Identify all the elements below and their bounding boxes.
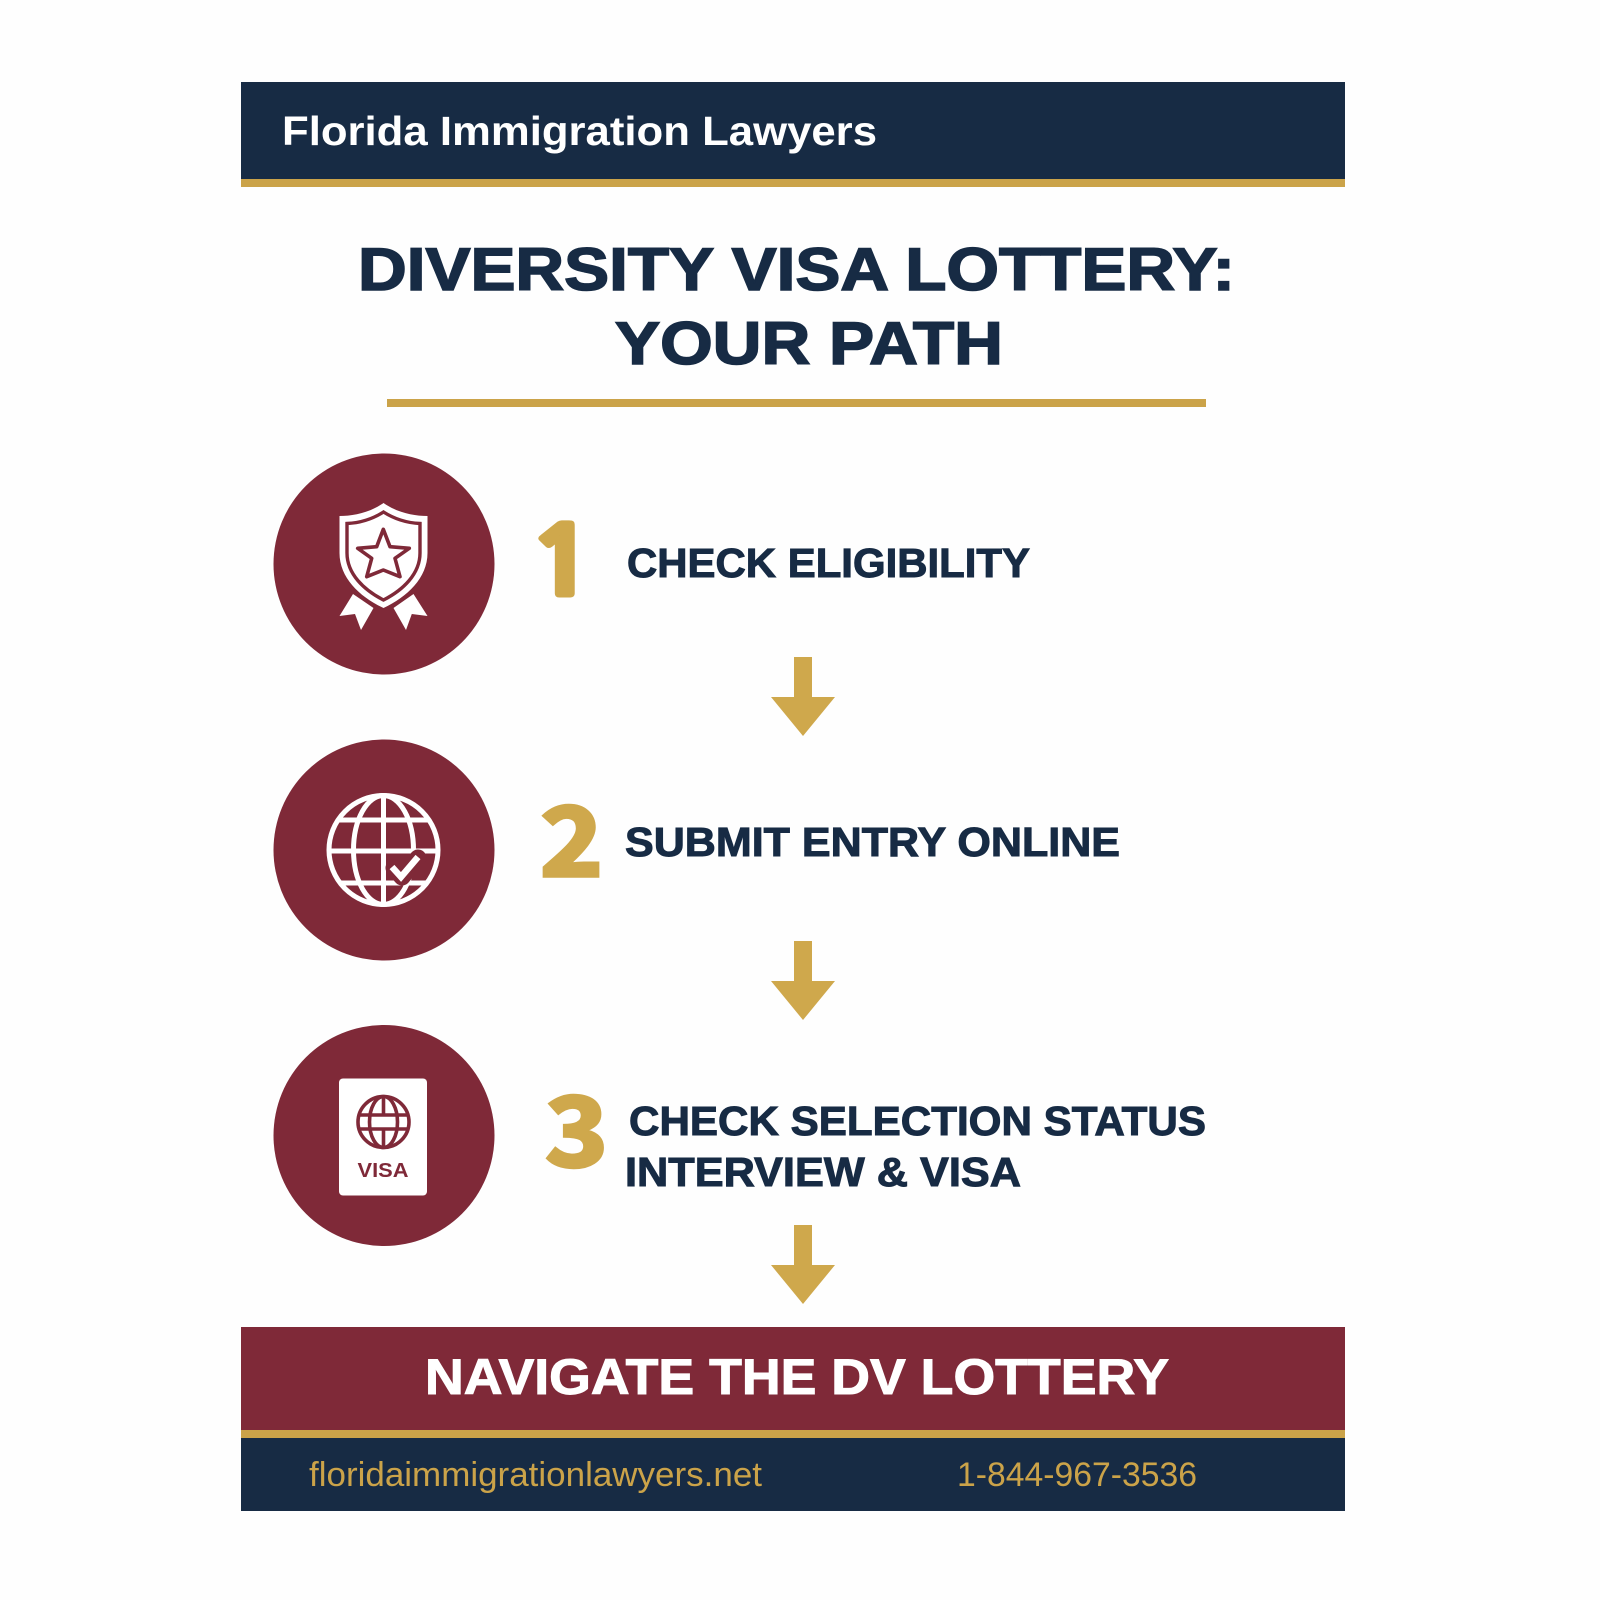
step 3 label: INTERVIEW & VISA	[625, 1149, 1021, 1195]
step 2 label: SUBMIT ENTRY ONLINE	[625, 819, 1120, 865]
title: DIVERSITY VISA LOTTERY:	[358, 236, 1235, 303]
number 2: 2	[539, 764, 604, 906]
phone: 1-844-967-3536	[957, 1456, 1197, 1494]
icon: shield with star and ribbons	[274, 454, 494, 674]
number 1: 1	[529, 515, 596, 609]
call to action banner	[241, 1327, 1345, 1430]
title	[358, 236, 1235, 377]
header bar	[241, 82, 1345, 187]
title underline	[387, 399, 1206, 407]
step 3 label	[625, 1098, 1206, 1195]
icon: visa passport	[274, 1025, 494, 1246]
footer	[241, 1430, 1345, 1511]
step 3 label: CHECK SELECTION STATUS	[629, 1098, 1206, 1144]
arrow 1	[771, 657, 835, 736]
step 1 label: CHECK ELIGIBILITY	[627, 540, 1030, 586]
brand name: Florida Immigration Lawyers	[282, 108, 877, 154]
step 1	[274, 454, 1030, 674]
step 2	[274, 740, 1120, 960]
number 3: 3	[544, 1054, 609, 1196]
title: YOUR PATH	[615, 310, 1003, 377]
banner text: NAVIGATE THE DV LOTTERY	[425, 1349, 1169, 1405]
website: floridaimmigrationlawyers.net	[309, 1456, 763, 1494]
icon: globe with check mark	[274, 740, 494, 960]
arrow 3	[771, 1225, 835, 1304]
step 3	[274, 1025, 1206, 1246]
arrow 2	[771, 941, 835, 1020]
icon: visa passport: VISA	[358, 1160, 408, 1182]
